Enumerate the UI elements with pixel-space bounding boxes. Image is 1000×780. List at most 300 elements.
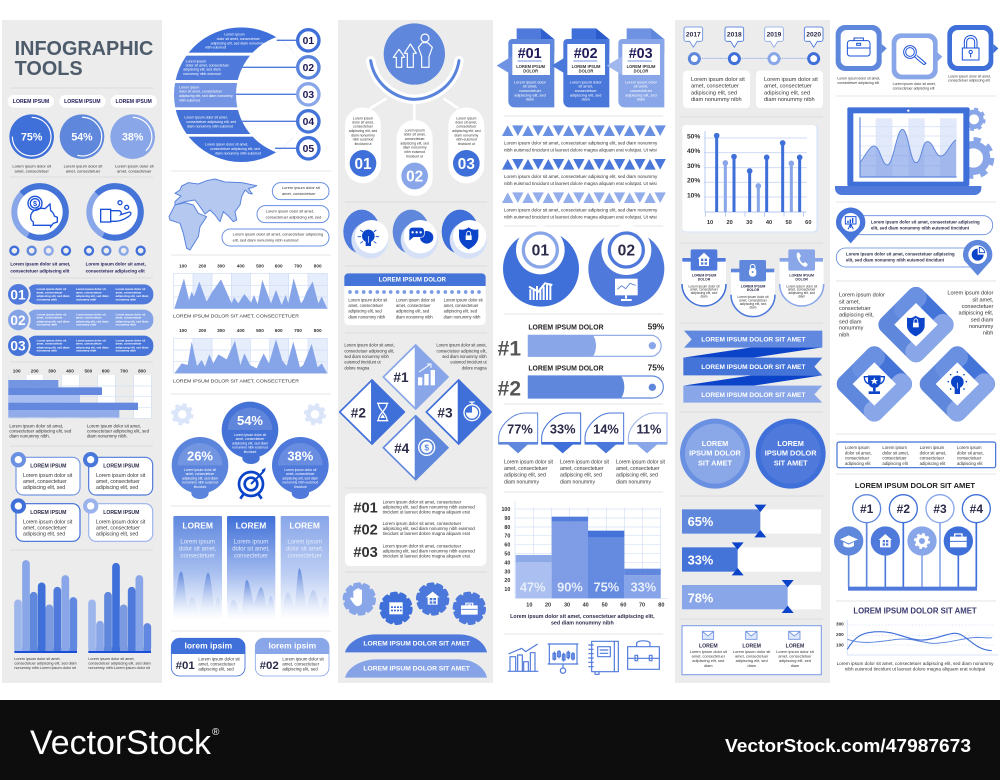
percent tags: Lorem ipsum dolor sit [616,459,666,465]
map pin notes: Lorem ipsum dolor sit amet, consectetuer adipiscing [871,220,980,225]
numbered crescent list: 04 [303,117,314,128]
footer band: VectorStock [30,724,212,762]
four-diamond diagram: $ [424,442,429,452]
map pin notes [836,208,993,276]
card: numbered list: #01 [353,501,378,517]
growth hub diagram: 01 [354,156,372,173]
numbered rows: nonummy nibh [76,349,97,353]
stacked column chart: 40 [583,602,589,608]
idea, chat, security icons [343,210,487,259]
stacked column chart: 40 [504,560,510,566]
world map with notes: Lorem ipsum dolor sit [282,185,321,190]
numbered rows: Lorem ipsum dolor sit [116,312,145,316]
numbered crescent list: 05 [303,144,314,155]
map pin notes: elit, sed diam nonummy nibh euismod tincidunt [846,257,945,262]
percent drops with target: 26% [187,448,213,463]
percent drops with target [172,402,329,499]
triangle rows with text: Lorem ipsum dolor sit amet, consectetuer adipiscing elit, sed diam nonummy [504,207,658,212]
lollipop chart: 60 [805,220,811,226]
four-diamond diagram: Lorem ipsum dolor sit amet, [344,343,395,348]
panel: column 2 [168,27,330,676]
area chart 1: 600 [275,263,283,268]
horizontal bar chart: 700 [120,368,128,373]
four column note: adipiscing elit [845,461,871,466]
card: numbered list: #03 [353,545,378,561]
document tags: consectetuer [630,89,653,93]
mail card: diam [791,663,800,668]
numbered crescent list: dolor sit amet, consectetuer [179,90,223,94]
rounded bar charts: consectetuer adipiscing elit, sed diam [14,661,77,665]
linked diamond: shield: nonummy [969,324,994,330]
horizontal bar chart [8,368,151,439]
numbered rows: nonummy nibh [37,349,57,353]
four-diamond diagram: dolore magna [462,365,487,370]
area chart 2: 400 [237,328,245,333]
numbered crescent list: 03 [303,90,314,101]
progress bars: #1 [498,337,521,360]
bottom banners [345,634,487,678]
triangle rows with text: nibh euismod tincidunt ut laoreet dolore magna aliquam erat volutpat. Ut wisi [504,181,657,186]
percent tags [498,413,667,485]
panel: column 3 [340,23,491,678]
linked diamond: shield: consectetuer [839,306,871,312]
four column note: dolor sit amet, [957,450,984,455]
mail card: LOREM [699,643,718,649]
linked diamond: shield: Lorem ipsum dolor [947,291,993,297]
triangle rows with text: Lorem ipsum dolor sit amet, consectetuer adipiscing elit, sed diam nonummy [504,174,658,179]
horizontal bar chart: diam nonummy nibh. [87,434,128,439]
numbered rows: amet, consectetuer [37,316,63,320]
icon shields [682,249,824,317]
document tags: adipiscing elit, sed [514,93,546,97]
numbered rows: Lorem ipsum dolor sit [37,338,66,342]
numbered big circles: 01 [532,242,549,259]
percent tags: diam nonummy [504,479,539,485]
mail card: amet, consectetuer [778,653,812,658]
horizontal bar chart: consectetuer adipiscing elit, sed [9,428,72,433]
text cards: Lorem ipsum dolor sit [96,473,146,479]
horizontal bar chart: 500 [84,368,93,373]
growth hub diagram: nibh euismod [353,138,373,142]
percent bars with markers: 65% [688,514,714,529]
icon rings: piggy bank and hand: consectetuer adipiscing elit [10,268,70,273]
lollipop chart: 40% [687,148,700,155]
percent drops with target: adipiscing elit, sed diam [232,441,268,445]
document tags: Lorem ipsum dolor [625,80,658,84]
map pin notes: elit, sed diam nonummy nibh euismod tincidunt [871,225,970,230]
stacked column chart: 20 [504,578,510,584]
icon shields: LOREM IPSUM [789,274,814,278]
percent bars with markers [682,505,821,613]
four column note: consectetuer [882,456,907,461]
mail card: adipiscing elit, sed [779,658,811,663]
labelled cards: amet, consectetuer [282,661,320,666]
panel: column 6 [833,25,999,672]
triangle rows with text [502,125,666,219]
growth hub diagram: 02 [406,169,423,186]
text cards: LOREM IPSUM [103,464,139,470]
timeline: Lorem ipsum dolor sit [764,77,818,83]
icon frames: consectetuer adipiscing elit [893,86,935,90]
icon shields: amet, consectetuer [739,298,768,302]
ribbons: LOREM IPSUM DOLOR SIT AMET [701,392,805,399]
four column note: adipiscing elit [957,461,983,466]
numbered crescent list: nibh euismod [205,46,226,50]
numbered rows: nonummy nibh [116,349,136,353]
numbered rows: amet, consectetuer [76,316,103,320]
linked diamond: shield: Lorem ipsum dolor [839,293,885,299]
icon frames: consectetuer adipiscing elit [837,81,879,85]
labelled cards: Lorem ipsum dolor sit [198,657,241,662]
horizontal bar chart: 100 [13,368,21,373]
numbered rows: nonummy nibh [116,323,136,327]
ribbons: LOREM IPSUM DOLOR SIT AMET [701,336,805,343]
lollipop chart: 40 [766,220,772,226]
percent drops with target: amet, consectetuer [186,472,215,476]
percent tags: 77% [507,421,533,436]
stacked column chart: 47% [520,580,546,595]
rounded bar charts: consectetuer adipiscing elit, sed diam [88,661,151,665]
percent tags: adipiscing elit, sed [504,473,546,479]
text cards: adipiscing elit, sed [23,531,65,537]
round badges [680,419,826,489]
mail card: diam [747,663,757,668]
icon shields: Lorem ipsum dolor sit [688,284,720,288]
stacked column chart: 80 [504,525,510,531]
text cards: Lorem ipsum dolor sit [96,519,146,525]
numbered tree diagram: #3 [933,502,947,516]
labelled cards: #02 [260,660,279,672]
progress bars: LOREM IPSUM DOLOR [528,324,604,331]
four column note: dolor sit amet, [882,450,909,455]
numbered rows: Lorem ipsum dolor sit [76,338,106,342]
numbered crescent list: Lorem ipsum dolor sit amet, [205,143,248,147]
four column note: Lorem ipsum [957,445,982,450]
area chart 1: 800 [314,263,322,268]
stacked column chart: sed diam nonummy nibh [551,621,614,627]
numbered crescent list: 02 [303,63,314,74]
icon shields: diam [749,306,757,310]
world map with notes: elit, sed diam nonummy nibh euismod [233,237,299,242]
percent tags: 11% [637,421,662,436]
percent tags: amet, consectetuer [504,466,548,472]
gradient panels: consectetuer [234,553,268,559]
round badges: SIT AMET [774,458,808,467]
stacked column chart: 30 [564,602,570,608]
card: lorem ipsum dolor: diam nonummy nibh [348,314,385,319]
stacked column chart: 60 [504,543,510,549]
numbered rows [6,282,153,358]
four-diamond diagram: sed diam nonummy nibh [344,354,389,359]
card: numbered list: Lorem ipsum dolor sit amet, consectetuer [383,521,462,526]
percent circles: Lorem ipsum dolor sit [115,164,155,169]
numbered rows: 03 [10,339,26,354]
lollipop chart: 10 [707,220,713,226]
numbered crescent list: diam nonummy nibh euismod [215,151,261,155]
line chart: LOREM IPSUM DOLOR SIT AMET [853,606,977,615]
icon shields: adipiscing elit, sed [691,291,717,295]
card: numbered list: tincidunt ut laoreet dolore magna aliquam erat [383,554,471,559]
mail card: Lorem ipsum dolor sit [690,649,728,654]
numbered crescent list: consectetuer adipiscing elit, sed [186,120,236,124]
document tags: sit amet, [634,85,648,89]
card: lorem ipsum dolor [344,273,486,325]
stacked column chart: 75% [593,580,620,595]
stacked column chart: 10 [504,587,510,593]
document tags: DOLOR [634,69,648,74]
four-diamond diagram: euismod tincidunt ut [344,360,381,365]
line icons row [508,641,659,674]
numbered crescent list: consectetuer adipiscing elit, sed [210,147,260,151]
card: lorem ipsum dolor: adipiscing elit, sed [444,309,477,314]
numbered rows: Lorem ipsum dolor sit [37,312,66,316]
progress bars: LOREM IPSUM DOLOR [528,366,604,373]
text cards: amet, consectetuer [23,479,67,485]
growth hub diagram: 03 [458,156,475,173]
numbered rows: amet, consectetuer [116,316,142,320]
card: lorem ipsum dolor: diam nonummy nibh [444,314,480,319]
four-diamond diagram: #1 [393,370,409,385]
world map with notes: amet, consectetuer [282,191,316,196]
labelled cards: adipiscing elit, sed [198,666,234,671]
numbered tree diagram: #4 [970,502,983,516]
rounded bar charts: Lorem ipsum dolor sit amet, [14,657,61,661]
mail card: amet, consectetuer [692,653,726,658]
text cards: adipiscing elit, sed [96,531,138,537]
timeline: diam nonummy nibh [764,97,815,103]
area chart 2: 200 [198,328,207,333]
horizontal bar chart: Lorem ipsum dolor sit amet, [9,423,63,428]
lollipop chart: 30 [746,220,752,226]
numbered rows: adipiscing elit, sed diam [116,319,149,323]
stacked column chart: 90 [504,516,510,522]
timeline: 2017 [686,32,701,39]
timeline: 2018 [727,32,742,39]
four-diamond diagram: euismod tincidunt ut [450,360,488,365]
growth hub diagram: consectetuer [405,137,425,141]
horizontal bar chart: 800 [138,368,146,373]
progress bars: #2 [498,377,521,400]
linked diamonds: trophy and bulb [833,343,999,425]
text cards: amet, consectetuer [23,525,67,531]
four-diamond diagram: consectetuer adipiscing elit, [437,348,487,353]
triangle rows with text: nibh euismod tincidunt ut laoreet dolore magna aliquam erat volutpat. Ut wisi [504,214,657,219]
area chart 1: 100 [179,263,187,268]
document tags: Lorem ipsum dolor [570,80,602,84]
area chart 1: 400 [237,263,245,268]
numbered rows: amet, consectetuer [37,290,63,294]
timeline: amet, consectetuer [764,84,812,90]
area chart 2 [173,328,327,384]
timeline: adipiscing elit, sed [764,90,810,96]
percent circles: LOREM IPSUM [64,99,101,105]
gradient panels: Lorem ipsum [234,539,268,545]
linked diamond: shield: nonummy [839,326,864,332]
card: lorem ipsum dolor: LOREM IPSUM DOLOR [379,277,447,284]
numbered rows: adipiscing elit, sed diam [116,345,149,349]
stacked column chart: 30 [504,569,510,575]
icon shields: diam [798,295,805,299]
stacked column chart: 70 [639,602,645,608]
lollipop chart [682,125,818,233]
icon shields: LOREM IPSUM [692,274,716,278]
percent bars with markers: 33% [688,553,714,568]
growth hub diagram: diam nonummy [351,133,375,137]
numbered rows: adipiscing elit, sed diam [76,345,109,349]
gradient panels: consectetuer [181,553,215,559]
percent circles: 38% [122,131,144,143]
linked diamond: shield: nibh [983,330,993,336]
icon shields: adipiscing elit, sed [788,291,815,295]
line chart [836,606,998,672]
round badges: IPSUM DOLOR [765,449,817,458]
gradient panels: Lorem ipsum [287,539,322,545]
stacked column chart: 10 [526,602,532,608]
icon frames: consectetuer adipiscing elit [948,79,990,83]
numbered rows: adipiscing elit, sed diam [37,294,70,298]
icon rings: piggy bank and hand: consectetuer adipiscing elit [86,268,145,273]
percent drops with target: nonummy nibh euismod [282,481,318,485]
numbered crescent list: adipiscing elit, sed diam nonummy [211,41,265,45]
rounded bar charts: Lorem ipsum dolor sit amet, [88,657,135,661]
stacked column chart: 33% [630,580,657,595]
area chart 1 [173,263,327,318]
four column note: dolor sit amet, [845,450,872,455]
icon shields: DOLOR [747,288,760,292]
numbered rows: nonummy nibh [37,297,57,301]
mail card: LOREM [786,643,804,649]
document tags: adipiscing elit, sed [625,93,657,97]
horizontal bar chart: 300 [48,368,56,373]
bottom banners: LOREM IPSUM DOLOR SIT AMET [363,666,471,673]
percent tags: Lorem ipsum dolor sit [560,459,610,465]
text cards: Lorem ipsum dolor sit [23,519,73,525]
numbered rows: nonummy nibh [116,297,136,301]
numbered crescent list: dolor sit amet, consectetuer [186,64,230,68]
area chart 1: 500 [256,263,264,268]
mail card: adipiscing elit, sed [692,658,724,663]
rounded bar charts: nonummy nibh.Lorem ipsum dolor sit [88,666,151,670]
labelled cards: lorem ipsim [269,641,317,651]
card: lorem ipsum dolor: Lorem ipsum dolor sit [396,297,436,302]
percent drops with target: tincidunt [294,485,307,489]
timeline: Lorem ipsum dolor sit [691,77,745,83]
area chart 1: 200 [198,263,207,268]
four-diamond diagram: #2 [351,405,366,420]
icon rings: piggy bank and hand [10,186,146,273]
document tags [497,28,664,107]
growth hub diagram [345,23,484,196]
numbered rows: adipiscing elit, sed diam [76,294,109,298]
line chart: 200 [836,632,844,637]
numbered crescent list: adipiscing elit, sed diam nonummy [179,94,233,98]
icon rings: piggy bank and hand: Lorem ipsum dolor sit amet, [10,261,70,266]
gradient panels: Lorem ipsum [180,539,215,545]
growth hub diagram: consectetuer [353,125,374,129]
percent drops with target: 54% [237,413,263,428]
four-diamond diagram: sed diam nonummy nibh [442,354,487,359]
four column note: adipiscing elit [920,461,946,466]
growth hub diagram: dolor sit amet, [404,133,426,137]
mail card [682,626,821,675]
footer band: VectorStock.com/47987673 [725,736,971,756]
percent circles: LOREM IPSUM [13,99,49,105]
four column note: consectetuer [957,456,982,461]
timeline: adipiscing elit, sed [691,90,737,96]
numbered rows: nonummy nibh [76,323,97,327]
icon rings: piggy bank and hand: $ [33,199,37,208]
labelled cards: amet, consectetuer [198,661,236,666]
linked diamond: shield: sed diam [839,319,862,325]
lollipop chart: 50 [786,220,792,226]
area chart 2: 700 [294,328,302,333]
rounded bar charts [14,564,151,670]
percent tags: amet, consectetuer [616,466,660,472]
labelled cards: adipiscing elit, sed [282,666,318,671]
card: numbered list [345,493,486,566]
numbered tree diagram: LOREM IPSUM DOLOR SIT AMET [855,481,975,490]
panel: column 4 [497,28,668,674]
growth hub diagram: tincidunt ut [355,142,371,146]
labelled cards: #01 [176,660,195,672]
line chart: 300 [836,622,844,627]
numbered rows: Lorem ipsum dolor sit [116,338,145,342]
percent circles: Lorem ipsum dolor sit [12,164,52,169]
card: numbered list: tincidunt ut laoreet dolore magna aliquam erat [383,531,471,536]
stacked column chart: 80 [658,602,664,608]
percent tags: adipiscing elit, sed [616,473,658,479]
text cards [11,452,153,541]
four-diamond diagram: consectetuer adipiscing elit, [344,348,394,353]
stacked column chart: 100 [501,507,510,513]
labelled cards: lorem ipsim [185,641,233,651]
icon shields: LOREM IPSUM [741,284,765,288]
progress bars [498,321,665,400]
numbered crescent list: Lorem ipsum dolor sit amet, [184,116,228,120]
title: INFOGRAPHIC [15,38,153,60]
numbered tree diagram: #1 [860,502,874,516]
growth hub diagram: Lorem ipsum [353,116,373,120]
percent circles: amet, consectetuer [14,168,50,173]
gradient panels: LOREM [182,521,213,531]
document tags: consectetuer [519,89,542,93]
icon frames: Lorem ipsum dolor sit amet, [893,82,936,86]
text cards: LOREM IPSUM [103,510,139,516]
numbered rows: adipiscing elit, sed diam [116,294,149,298]
timeline: diam nonummy nibh [691,97,742,103]
numbered rows: nonummy nibh [37,323,57,327]
four column note: adipiscing elit [882,461,909,466]
numbered crescent list: Lorem ipsum [179,85,199,89]
card: lorem ipsum dolor: adipiscing elit, sed [396,309,429,314]
icon shields: Lorem ipsum dolor sit [786,284,817,288]
stacked column chart [501,501,668,627]
footer band: ® [212,727,220,738]
percent drops with target: tincidunt [244,450,256,454]
world map with notes [169,179,329,250]
percent drops with target: tincidunt [194,485,206,489]
area chart 2: 800 [314,328,322,333]
linked diamond: shield: adipiscing elit, [958,311,994,317]
document tags: diam [581,98,590,102]
ribbons: LOREM IPSUM DOLOR SIT AMET [701,364,805,371]
four column note: consectetuer [845,456,870,461]
icon shields: DOLOR [795,277,808,281]
icon shields: amet, consectetuer [690,288,719,292]
horizontal bar chart: 600 [102,368,110,373]
growth hub diagram: adipiscing elit, sed [452,129,481,133]
numbered rows: nonummy nibh [76,297,97,301]
